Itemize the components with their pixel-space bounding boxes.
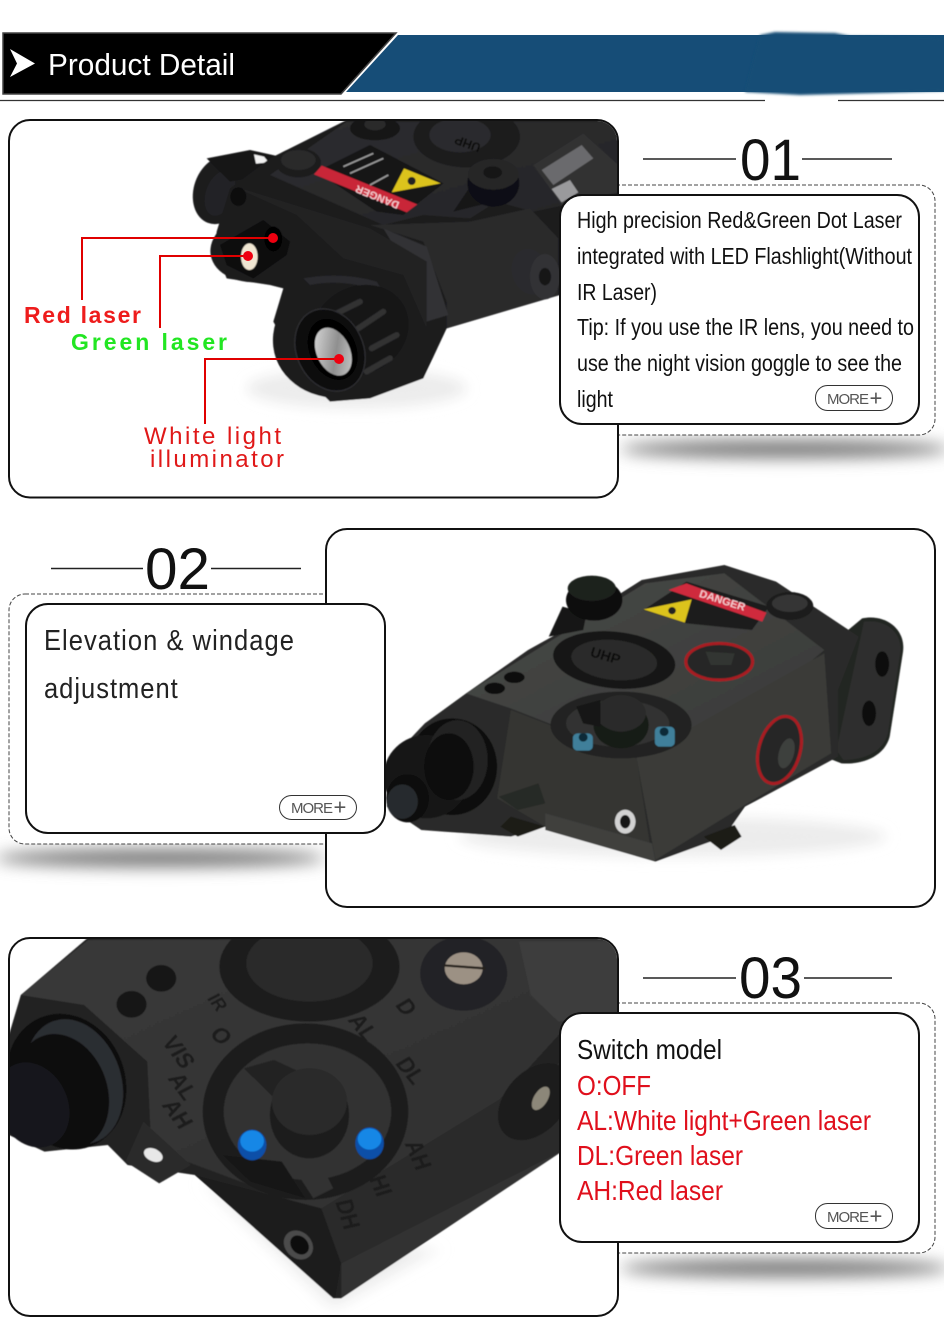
device photo 1	[184, 106, 618, 418]
device photo 1: UHP	[452, 132, 483, 155]
engraved markings: DL	[390, 1052, 432, 1089]
switch modes list: O:OFF	[577, 1070, 651, 1101]
UHP recess	[414, 122, 520, 167]
side face	[337, 1100, 545, 1228]
rear ring	[192, 161, 243, 225]
button: more	[280, 794, 356, 820]
top face	[21, 938, 622, 1212]
panel: photo 2, top of laser device	[326, 529, 935, 907]
rim screw and button	[230, 187, 246, 206]
body silhouette	[387, 565, 859, 862]
panel: photo 1, front of laser device	[9, 106, 618, 498]
banner blue stripe	[346, 32, 944, 95]
device photo 1: DANGER	[354, 182, 401, 211]
banner title: Product Detail	[48, 47, 235, 82]
section 02 number: 02	[145, 537, 210, 602]
description text	[577, 207, 914, 412]
engraved markings: IR	[203, 990, 233, 1014]
button	[766, 592, 813, 620]
front face	[195, 1176, 338, 1258]
flashlight	[272, 276, 400, 398]
rotary recess	[203, 1023, 408, 1200]
side dial	[506, 244, 554, 299]
callout lines and dots	[82, 238, 339, 424]
section 03 number: 03	[739, 946, 802, 1011]
icon: chevron arrow	[10, 49, 35, 77]
description text: Elevation & windage	[44, 623, 294, 656]
side face	[637, 653, 831, 860]
adjuster dial	[454, 190, 482, 212]
engraved markings: DH	[330, 1197, 366, 1232]
label: green laser: Green laser	[71, 329, 227, 355]
button: more	[816, 386, 892, 410]
section 02 backing: shadow and dashed frame	[0, 594, 344, 867]
section 01 number: 01	[740, 128, 801, 193]
text box 01	[560, 195, 919, 424]
rotary switch	[550, 692, 692, 758]
device photo 2: UHP	[588, 645, 622, 668]
description text: adjustment	[44, 671, 178, 704]
top dial	[549, 607, 587, 637]
front face	[498, 711, 648, 842]
button: more: MORE	[827, 1209, 868, 1226]
top dials	[350, 121, 400, 140]
section 03 backing: shadow and dashed frame	[600, 1003, 944, 1277]
UHP recess	[552, 630, 676, 689]
top recess	[219, 939, 400, 1022]
switch model heading: Switch model	[577, 1034, 722, 1065]
strap tab	[126, 1122, 191, 1183]
switch modes list: DL:Green laser	[577, 1140, 743, 1171]
button: more: +	[870, 386, 882, 410]
engraved markings: D	[390, 994, 423, 1020]
engraved markings: HI	[364, 1172, 398, 1199]
mounting holes	[117, 991, 147, 1018]
leader: green laser	[160, 256, 248, 328]
top face	[467, 573, 824, 728]
flashlight	[0, 1006, 139, 1158]
header banner	[0, 32, 944, 100]
label: white light illuminator: illuminator	[150, 446, 284, 473]
engraved markings: AL	[163, 1068, 204, 1104]
warning label	[317, 145, 443, 215]
button: more	[816, 1204, 892, 1228]
switch modes list	[577, 1070, 871, 1206]
banner black tab	[3, 33, 396, 94]
engraved markings: AH	[399, 1137, 438, 1173]
switch modes list: AL:White light+Green laser	[577, 1105, 871, 1136]
body silhouette	[215, 120, 618, 402]
description text: IR Laser)	[577, 279, 657, 305]
blue screws	[238, 1130, 266, 1160]
jack	[615, 810, 636, 834]
blue screws	[573, 733, 593, 751]
engraved markings: AH	[157, 1095, 199, 1133]
compliance plate	[534, 146, 617, 204]
underside rail	[704, 825, 742, 850]
red marker rings	[688, 644, 808, 787]
aperture markers	[243, 233, 344, 364]
label: white light illuminator	[144, 423, 284, 473]
device photo 2: DANGER	[698, 588, 747, 614]
banner underline	[0, 100, 944, 102]
button: more: +	[334, 794, 346, 820]
label: white light illuminator: White light	[144, 423, 281, 450]
button: more: MORE	[291, 800, 332, 817]
section 01 backing: shadow and dashed frame	[600, 185, 944, 458]
button: more: MORE	[827, 391, 868, 408]
engraved markings: O	[205, 1021, 238, 1050]
switch modes list: AH:Red laser	[577, 1175, 723, 1206]
label: red laser: Red laser	[24, 302, 141, 328]
engraved markings: VIS	[157, 1032, 201, 1072]
leader: white light	[205, 359, 339, 424]
engraved markings	[157, 990, 438, 1232]
warning label	[643, 582, 769, 630]
button: more: +	[870, 1204, 882, 1228]
description text: light	[577, 386, 613, 412]
housing for laser apertures	[210, 221, 290, 283]
jack	[278, 1226, 318, 1264]
mounting pad	[824, 617, 903, 764]
side selector	[483, 1052, 587, 1151]
text box 02	[26, 604, 385, 833]
selector knob	[244, 1060, 313, 1102]
flashlight	[383, 718, 497, 822]
text box 03	[560, 1013, 919, 1242]
panel: photo 3, rotary switch close-up	[0, 912, 622, 1316]
elevation screw	[420, 936, 507, 1011]
engraved markings: AL	[343, 1009, 384, 1045]
device photo 2	[383, 565, 903, 862]
holes	[504, 672, 525, 683]
device photo 3	[0, 912, 622, 1308]
body silhouette	[9, 938, 622, 1298]
leader: red laser	[82, 238, 272, 300]
description text	[44, 623, 294, 704]
